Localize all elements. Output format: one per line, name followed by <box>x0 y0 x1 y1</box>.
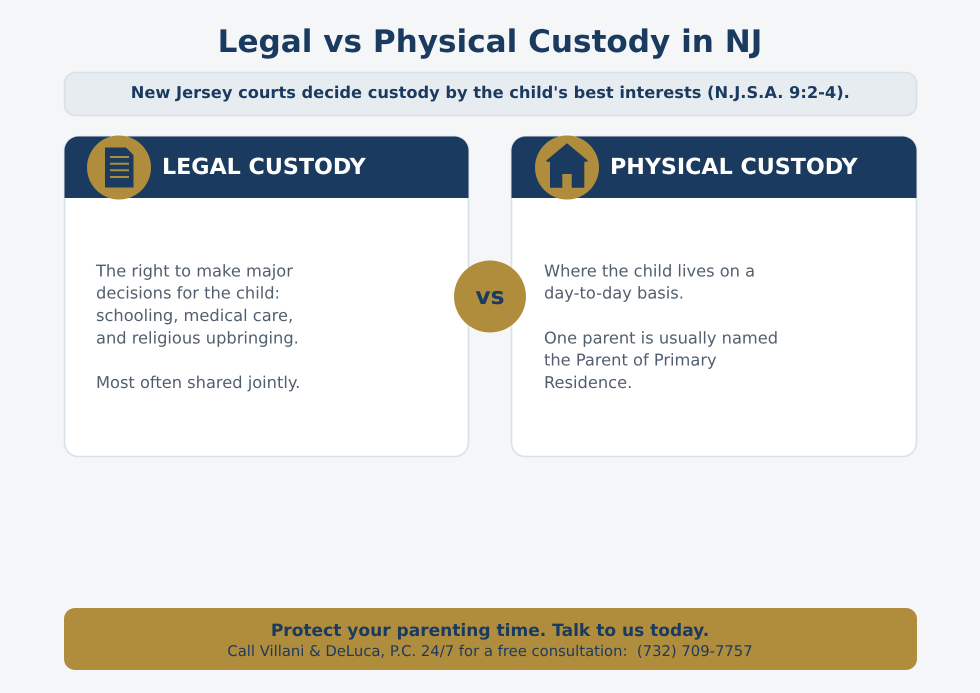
legal custody description: Most often shared jointly. <box>96 373 300 392</box>
legal custody description: schooling, medical care, <box>96 306 293 325</box>
vs badge: vs <box>475 282 505 310</box>
call to action banner: Protect your parenting time. Talk to us today. <box>271 621 709 641</box>
legal custody description: decisions for the child: <box>96 284 280 303</box>
icon: document <box>87 136 151 200</box>
panel: physical custody <box>512 136 916 456</box>
call to action banner: Call Villani & DeLuca, P.C. 24/7 for a free consultation: (732) 709-7757 <box>227 643 753 660</box>
intro banner: New Jersey courts decide custody by the child's best interests (N.J.S.A. 9:2-4). <box>131 83 850 102</box>
legal custody description: The right to make major <box>95 261 293 280</box>
physical custody description: Residence. <box>544 373 632 392</box>
legal custody description: and religious upbringing. <box>96 328 299 347</box>
physical custody description: day-to-day basis. <box>544 284 684 303</box>
legal custody heading: LEGAL CUSTODY <box>162 154 367 180</box>
intro banner <box>64 72 916 116</box>
panel: legal custody <box>64 136 468 456</box>
legal custody header <box>64 136 468 198</box>
physical custody heading: PHYSICAL CUSTODY <box>610 154 859 180</box>
icon: house <box>535 136 599 200</box>
physical custody header <box>512 136 916 198</box>
vs badge <box>454 260 526 332</box>
call to action banner <box>64 608 917 670</box>
physical custody description: Where the child lives on a <box>544 261 755 280</box>
title: Legal vs Physical Custody in NJ <box>218 24 762 60</box>
physical custody description: the Parent of Primary <box>544 350 717 370</box>
physical custody description: One parent is usually named <box>544 328 778 347</box>
